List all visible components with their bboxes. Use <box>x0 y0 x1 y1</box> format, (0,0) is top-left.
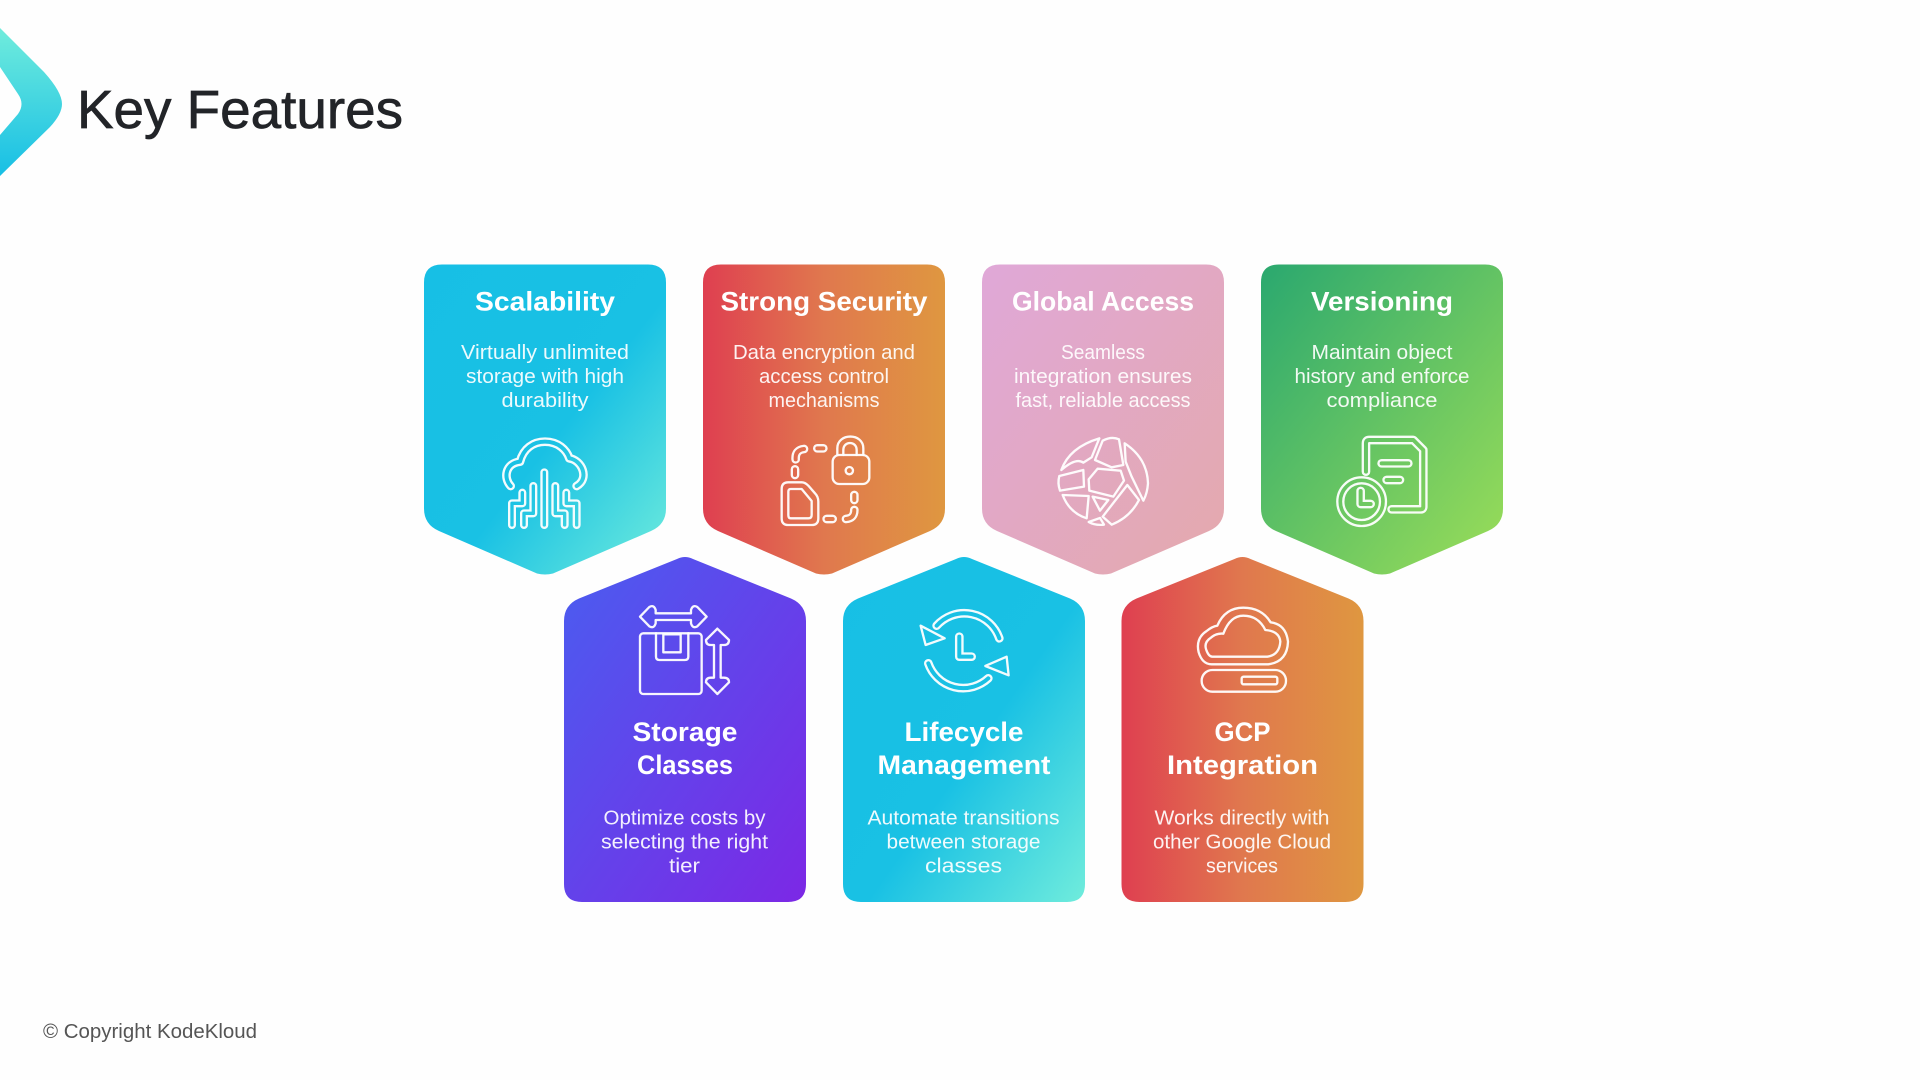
panel: Global Access <box>982 264 1224 574</box>
text block <box>1014 342 1192 412</box>
card shape <box>564 557 806 902</box>
card shape <box>843 557 1085 902</box>
heading: Versioning <box>1311 286 1453 316</box>
text block: services <box>1206 856 1278 878</box>
title: Key Features <box>77 80 403 140</box>
icon: cloud circuit <box>502 437 588 529</box>
card shape <box>424 264 666 574</box>
text block: Data encryption and <box>733 342 915 364</box>
heading <box>632 717 738 780</box>
heading <box>1167 717 1318 780</box>
icon: lock and document <box>780 435 870 526</box>
text block: Works directly with <box>1154 808 1330 830</box>
heading: Lifecycle <box>904 717 1024 747</box>
icon: document with clock <box>1336 436 1428 528</box>
text block <box>733 342 915 412</box>
text block: Automate transitions <box>868 808 1060 830</box>
icon: globe <box>1058 438 1148 525</box>
heading: Integration <box>1167 750 1318 780</box>
heading: Classes <box>637 750 733 780</box>
card shape <box>1261 264 1503 574</box>
text block: tier <box>669 856 700 878</box>
heading: Strong Security <box>720 286 928 316</box>
text block <box>1294 342 1470 412</box>
heading: GCP <box>1214 717 1270 747</box>
icon: cloud over storage <box>1198 608 1288 692</box>
heading: Scalability <box>475 286 615 316</box>
text block: selecting the right <box>601 832 768 854</box>
text block: Maintain object <box>1312 342 1453 364</box>
panel: Lifecycle Management <box>843 557 1085 902</box>
text block <box>601 808 768 878</box>
heading <box>878 717 1050 780</box>
text block: fast, reliable access <box>1016 390 1190 412</box>
panel: GCP Integration <box>1122 557 1364 902</box>
panel: Scalability <box>424 264 666 574</box>
text block: storage with high <box>466 366 624 388</box>
text block: other Google Cloud <box>1153 832 1331 854</box>
card shape <box>1122 557 1364 902</box>
panel: Versioning <box>1261 264 1503 574</box>
icon: lifecycle clock arrows <box>920 608 1010 692</box>
text block <box>1153 808 1331 878</box>
heading: Global Access <box>1012 286 1194 316</box>
text block: Virtually unlimited <box>461 342 629 364</box>
text block: between storage <box>886 832 1040 854</box>
card shape <box>982 264 1224 574</box>
heading: Management <box>878 750 1050 780</box>
text block <box>868 808 1060 878</box>
text block <box>461 342 629 412</box>
text block: mechanisms <box>768 390 880 412</box>
text block: durability <box>502 390 588 412</box>
text block: compliance <box>1326 390 1438 412</box>
icon: box with resize arrows <box>640 606 729 694</box>
icon: title chevron <box>0 28 62 176</box>
panel: Storage Classes <box>564 557 806 902</box>
heading: Storage <box>632 717 738 747</box>
panel: Strong Security <box>703 264 945 574</box>
text block: history and enforce <box>1294 366 1470 388</box>
text block: integration ensures <box>1014 366 1192 388</box>
text block: Optimize costs by <box>604 808 766 830</box>
copyright footer: © Copyright KodeKloud <box>43 1021 257 1043</box>
card shape <box>703 264 945 574</box>
text block: Seamless <box>1061 342 1145 364</box>
text block: classes <box>925 856 1002 878</box>
text block: access control <box>759 366 889 388</box>
